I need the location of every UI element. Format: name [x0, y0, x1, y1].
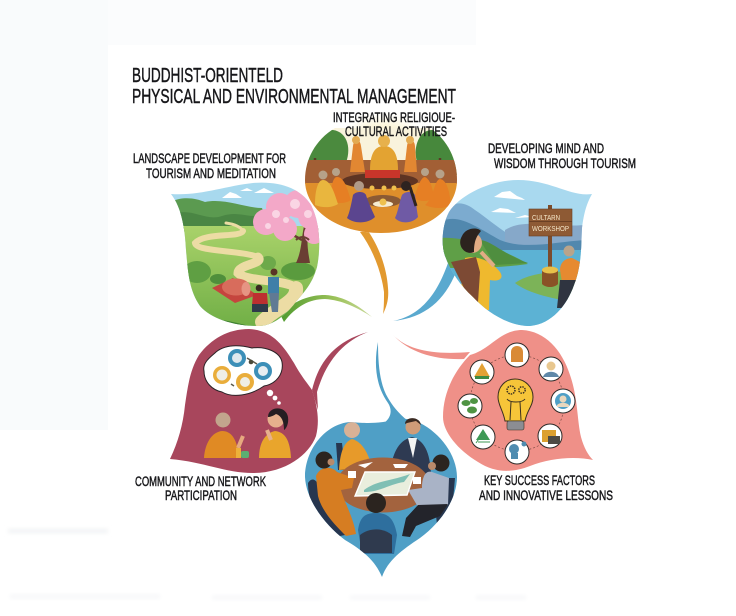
sign: cultarn workshop: [529, 209, 572, 236]
stalk: mind: [393, 260, 456, 321]
heading: community and network participation: PARTICIPATION: [165, 488, 237, 503]
heading: key success factors: KEY SUCCESS FACTORS: [484, 473, 595, 488]
sign: cultarn workshop: CULTARN: [532, 213, 560, 222]
title: BUDDHIST-ORIENTELD: [132, 65, 283, 87]
stalk: community: [312, 332, 368, 410]
heading: community and network participation: [135, 474, 266, 503]
sign: cultarn workshop: WORKSHOP: [532, 224, 569, 233]
panel: community and network participation: [170, 329, 368, 473]
heading: developing mind and wisdom: WISDOM THROUGH TOURISM: [494, 156, 636, 171]
stalk: key: [393, 335, 470, 359]
heading: landscape development: [133, 151, 286, 181]
stalk: team: [376, 342, 408, 423]
maroon leaf: [170, 329, 318, 473]
stalk: landscape: [280, 295, 372, 322]
salmon leaf: [443, 330, 593, 471]
woman thinking: [259, 408, 291, 458]
illustration: meeting at round table: [300, 415, 460, 580]
suit man's head above leaf edge: [405, 418, 421, 434]
heading: developing mind and wisdom: [488, 141, 636, 171]
heading: key success factors: AND INNOVATIVE LESSONS: [479, 488, 613, 503]
illustration: monks around altar: [305, 128, 457, 233]
stalk: religious: [360, 231, 388, 314]
heading: integrating religious-cultural activities: INTEGRATING RELIGIOUE-: [333, 110, 455, 125]
icon: thought cloud: [204, 346, 282, 405]
heading: integrating religious-cultural activities: CULTURAL ACTIVITIES: [345, 124, 447, 139]
title: PHYSICAL AND ENVIRONMENTAL MANAGEMENT: [132, 86, 456, 108]
halo above shrine: [353, 121, 413, 149]
title: [132, 65, 456, 108]
panel: key success factors: [393, 330, 593, 471]
panel: team around table: [300, 342, 460, 580]
illustration: garden path and blossom tree: [171, 182, 320, 326]
icons: eight factor circles: [458, 343, 575, 464]
icon: light bulb with gears: [498, 379, 533, 430]
ring connector: [470, 355, 564, 451]
panel: landscape development: [165, 178, 372, 332]
heading: key success factors: [479, 473, 613, 503]
panel: integrating religious-cultural activities: [300, 121, 465, 314]
panel: developing mind and wisdom: [393, 175, 595, 330]
illustration: traveller and wooden sign: [440, 175, 595, 330]
heading: integrating religious-cultural activities: [333, 110, 455, 139]
heading: landscape development: TOURISM AND MEDITATION: [146, 166, 276, 181]
heading: landscape development: LANDSCAPE DEVELOPMENT FOR: [133, 151, 286, 166]
heading: community and network participation: COMMUNITY AND NETWORK: [135, 474, 266, 489]
heading: developing mind and wisdom: DEVELOPING MIND AND: [488, 141, 604, 156]
monk speaking: [204, 412, 249, 458]
